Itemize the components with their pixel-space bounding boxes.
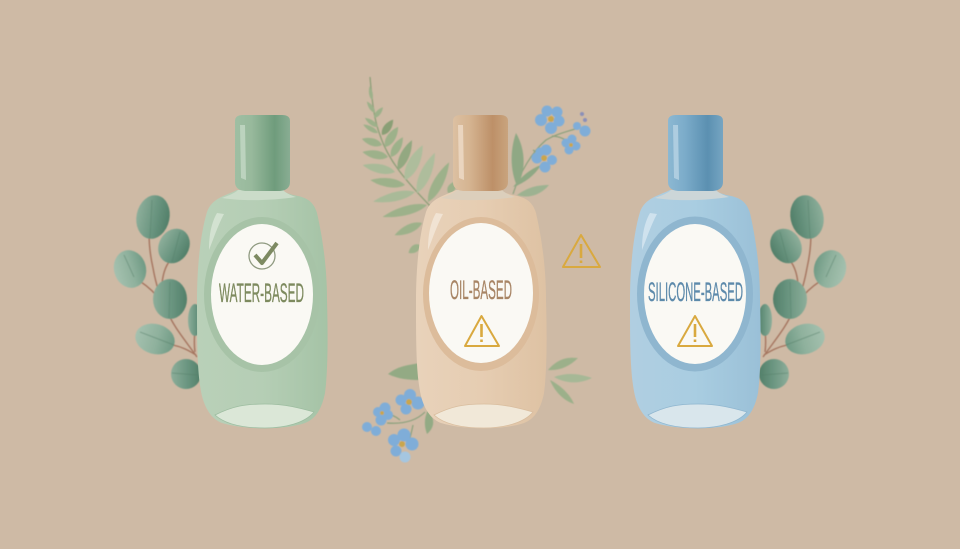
bottom glass xyxy=(434,404,533,428)
body xyxy=(630,190,761,428)
body xyxy=(416,190,547,428)
body xyxy=(197,190,328,428)
label ring xyxy=(423,217,539,371)
label xyxy=(429,223,533,363)
bottle: water-based: WATER-BASED xyxy=(219,278,304,308)
label xyxy=(644,224,746,364)
icon: check mark xyxy=(249,243,277,269)
cap highlight xyxy=(240,125,246,180)
text: SILICONE-BASED xyxy=(648,277,743,307)
cap xyxy=(235,115,290,191)
label xyxy=(211,224,313,365)
bottle: water-based xyxy=(197,115,328,428)
cap xyxy=(668,115,723,191)
bottle: oil-based xyxy=(416,115,547,428)
cap highlight xyxy=(673,125,679,180)
forget-me-not sprig top xyxy=(512,106,590,197)
fern behind oil bottle xyxy=(361,77,459,256)
leaves and forget-me-not sprig bottom xyxy=(362,358,592,462)
neck xyxy=(441,190,515,200)
neck xyxy=(655,190,729,200)
eucalyptus sprig right xyxy=(758,192,850,389)
highlight xyxy=(428,213,443,250)
label ring xyxy=(637,216,753,372)
neck xyxy=(222,190,296,200)
icon: warning xyxy=(678,316,712,346)
icon: warning xyxy=(465,316,499,346)
highlight xyxy=(642,213,657,250)
cap xyxy=(453,115,508,191)
highlight xyxy=(209,213,224,250)
bottom glass xyxy=(648,404,747,428)
cap highlight xyxy=(458,125,464,180)
bottle: silicone-based xyxy=(630,115,761,428)
eucalyptus sprig left xyxy=(110,192,202,389)
bottle: oil-based: OIL-BASED xyxy=(450,275,512,305)
icon: free-standing warning xyxy=(563,235,600,267)
label ring xyxy=(204,217,320,372)
bottom glass xyxy=(215,404,314,428)
